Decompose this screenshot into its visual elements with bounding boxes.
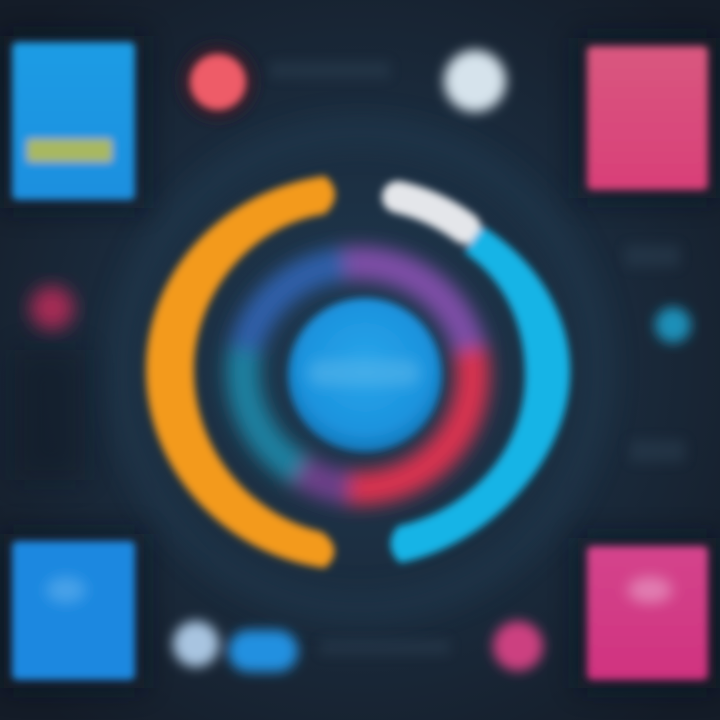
arc: violet	[300, 470, 350, 488]
icon: red circle	[180, 44, 256, 120]
card highlight	[628, 577, 672, 603]
card: bottom left blue	[12, 541, 135, 680]
arc: red	[350, 350, 473, 488]
faint label blurs	[270, 62, 685, 654]
yellow bar	[27, 139, 112, 162]
dark left column	[15, 350, 85, 480]
pill: toggle	[173, 621, 298, 672]
icon: magenta circle bottom	[493, 621, 543, 671]
outer ring chart	[146, 176, 570, 568]
arc: white	[398, 197, 465, 228]
arc: purple	[345, 263, 470, 350]
icon: white circle	[444, 50, 506, 112]
arc: teal	[243, 350, 300, 470]
arc: orange	[146, 176, 335, 568]
center circle	[288, 298, 442, 452]
center highlight	[308, 360, 420, 386]
card: top right pink	[587, 46, 708, 190]
icon: teal circle right	[655, 307, 691, 343]
card highlight	[46, 577, 86, 603]
icon: crimson circle left	[30, 286, 74, 330]
card: top left blue	[12, 42, 135, 200]
arc: cyan	[390, 226, 570, 563]
card: bottom right pink	[587, 546, 708, 680]
inner ring chart	[243, 263, 473, 488]
arc: blue	[245, 264, 345, 350]
halo ring behind chart	[122, 132, 598, 608]
